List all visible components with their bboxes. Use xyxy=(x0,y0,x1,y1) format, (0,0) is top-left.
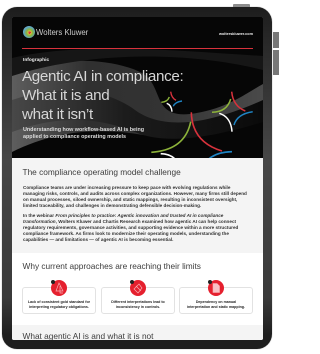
card 1 xyxy=(22,287,96,314)
number 2 xyxy=(130,280,134,284)
arc star: large xyxy=(151,112,232,159)
label: infographic: Infographic xyxy=(23,58,49,63)
device button: top xyxy=(233,4,250,7)
card 3 xyxy=(179,287,253,314)
arc star: small xyxy=(161,92,182,112)
panel: challenge xyxy=(12,158,263,253)
heading: The compliance operating model challenge xyxy=(22,166,181,176)
screen xyxy=(12,17,263,340)
card 2 xyxy=(101,287,175,314)
paragraph 1: Compliance teams are under increasing pressure to keep pace with evolving regulations while xyxy=(23,184,230,190)
paragraph 2: compliance framework. As firms look to modernize their operating models, understanding the xyxy=(23,231,229,236)
heading: Why current approaches are reaching their limits xyxy=(22,261,201,271)
card 2: inconsistency in controls. xyxy=(116,304,160,308)
paragraph 2: transformation, Wolters Kluwer and Chartis Research examined how agentic AI can help connect xyxy=(23,219,236,224)
icon: card 1 badge xyxy=(51,280,67,296)
card 1: Lack of consistent gold standard for xyxy=(28,300,90,304)
icon: Wolters Kluwer logo xyxy=(22,26,34,38)
paragraph 1: limited traceability, and challenges in demonstrating defensible decision-making. xyxy=(23,203,201,208)
card 3: Dependency on manual xyxy=(196,300,236,304)
hero artwork: waves and arcs xyxy=(12,17,263,158)
card 2: Different interpretations lead to xyxy=(111,300,165,304)
card 1: interpreting regulatory obligations. xyxy=(29,304,89,308)
icon: card 3 badge xyxy=(208,280,224,296)
paragraph 2 xyxy=(23,212,238,242)
panel: hero xyxy=(12,17,263,158)
paragraph 1: on manual processes, siloed ownership, and static mappings, resulting in inconsistent oversight, xyxy=(23,197,237,202)
paragraph 1 xyxy=(23,184,247,208)
arc star: medium xyxy=(212,92,253,132)
subtitle: Understanding how workflow-based AI is being xyxy=(23,126,144,132)
paragraph 2: In the webinar From principles to practice: Agentic innovation and trusted AI in compliance xyxy=(23,212,223,218)
website link: wolterskluwer.com xyxy=(219,32,253,36)
title: What it is and xyxy=(22,86,109,104)
subtitle xyxy=(23,126,144,140)
subtitle: applied to compliance operating models xyxy=(23,134,126,140)
title: what it isn’t xyxy=(22,106,93,122)
panel: limits xyxy=(12,253,263,325)
logo wordmark: Wolters Kluwer xyxy=(36,28,88,37)
number 3 xyxy=(208,280,212,284)
divider line xyxy=(22,48,253,49)
device buttons: side xyxy=(273,32,279,75)
icon: card 2 badge xyxy=(130,280,146,296)
paragraph 2: capabilities — and limitations — of agentic AI is becoming essential. xyxy=(23,237,173,242)
card 3: interpretation and static mapping. xyxy=(187,304,245,308)
paragraph 2: regulatory requirements, governance activities, and supporting evidence within a more structured xyxy=(23,225,238,230)
paragraph 1: managing risks, controls, and audits across complex organizations. However, many firms still depend xyxy=(23,191,247,196)
title xyxy=(22,68,183,122)
number 1 xyxy=(50,280,54,284)
panel: agentic AI xyxy=(12,325,263,340)
title: Agentic AI in compliance: xyxy=(22,68,183,84)
